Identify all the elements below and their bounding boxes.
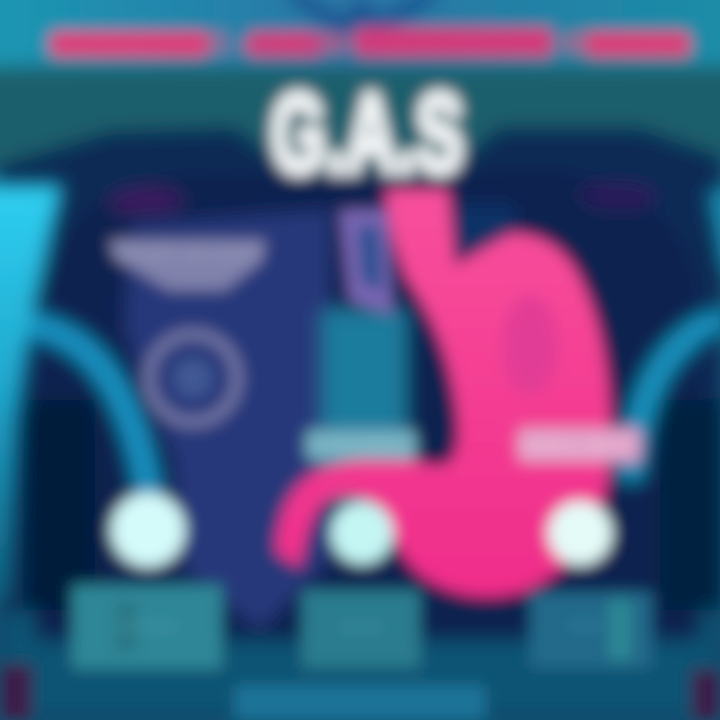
panel: left blue column <box>125 210 330 630</box>
heading: top banner text: GASTRIC AIR SYNDROME GUIDE <box>50 30 690 57</box>
text block: right label: RELIEF <box>523 438 633 455</box>
panel: right dark side <box>660 400 720 610</box>
text block: right label <box>518 428 640 462</box>
panel: stomach backing <box>455 205 515 255</box>
text block: left heading: WHAT IS GAS <box>112 244 262 264</box>
panel: lower teal floor <box>0 610 720 720</box>
icon: top chevron marks <box>290 0 435 28</box>
panel: dark body <box>35 170 700 640</box>
panel: central teal column <box>322 310 406 500</box>
icon: esophagus inner <box>358 226 382 292</box>
icon: stomach shading <box>502 295 558 395</box>
icon: bottom left accent <box>0 665 32 720</box>
text block: bottom center: Causes <box>339 618 384 633</box>
icon: center circle <box>331 502 393 564</box>
title: G.A.S <box>271 71 463 196</box>
icon: left circle <box>111 493 185 567</box>
panel: header lower band <box>0 66 720 178</box>
text block: bottom right: Relief <box>568 618 602 633</box>
panel: bottom centre strip <box>235 685 485 720</box>
text block: bottom center <box>302 590 420 668</box>
text block: left heading <box>108 240 266 290</box>
text block: center label <box>306 430 416 460</box>
arrow: right rib arc <box>630 318 720 480</box>
panel: left cyan edge <box>0 185 62 600</box>
icon: ring <box>149 334 237 422</box>
text block: bottom left <box>72 585 222 669</box>
icon: esophagus outline <box>340 210 392 315</box>
icon: right circle <box>548 501 612 565</box>
panel: top band <box>0 0 720 66</box>
panel: left dark side <box>25 400 95 610</box>
icon: right purple shoulder <box>580 181 660 209</box>
icon: bottom right accent <box>692 670 720 720</box>
arrow: left rib arc <box>30 325 150 500</box>
text block: bottom left: Symptoms <box>116 618 178 633</box>
text block: bottom right <box>530 592 652 668</box>
icon: left purple shoulder <box>107 186 183 214</box>
text block: center label: CAUSES <box>311 438 411 455</box>
icon: stomach <box>276 190 610 597</box>
heading: top banner text <box>50 28 690 57</box>
panel: right cyan edge <box>708 190 720 300</box>
